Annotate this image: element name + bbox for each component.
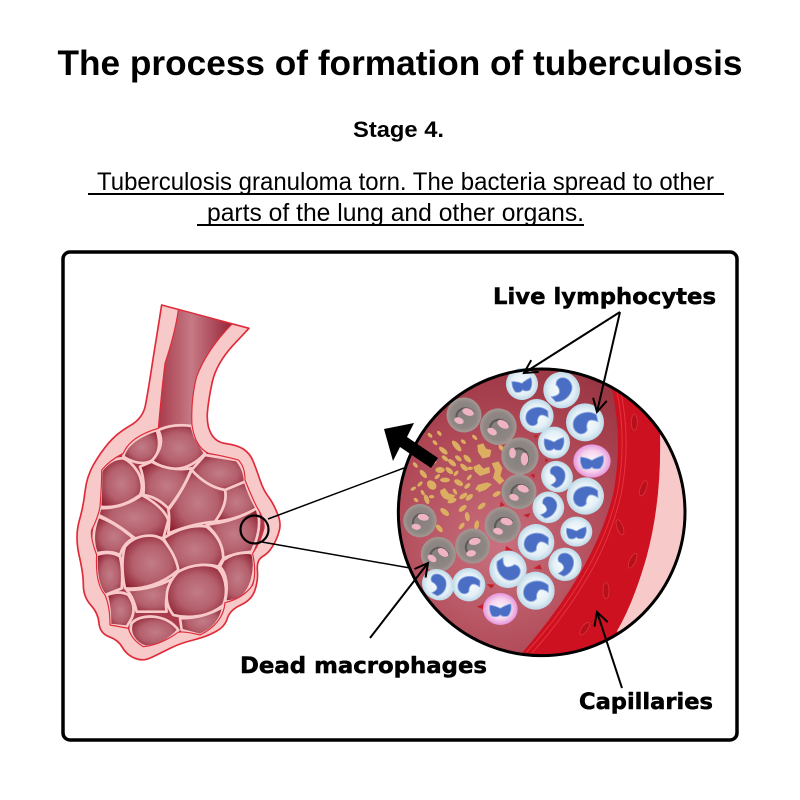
label: Live lymphocytes: Live lymphocytes	[493, 285, 716, 310]
title: The process of formation of tuberculosis	[58, 44, 742, 83]
alveolar sacs	[94, 425, 259, 647]
capillary	[522, 389, 684, 654]
arrow: capillaries	[597, 612, 622, 688]
arrow: dead macrophages	[370, 563, 428, 638]
panel: illustration frame	[63, 252, 737, 740]
zoom connector lines	[262, 468, 410, 568]
description text block: Tuberculosis granuloma torn. The bacteria spread to other	[97, 168, 714, 196]
label: Capillaries: Capillaries	[579, 690, 713, 715]
description text block: parts of the lung and other organs.	[207, 199, 584, 227]
bronchiole tube	[158, 310, 232, 429]
live lymphocytes	[416, 365, 611, 625]
magnifier ring on lung	[240, 516, 268, 544]
description text block	[88, 168, 724, 227]
inner wall outline	[91, 310, 264, 647]
arrow: spread direction	[384, 423, 438, 468]
alveolus inner cavity	[91, 310, 264, 647]
bacteria	[410, 430, 505, 533]
illustration: lung alveoli	[77, 305, 280, 660]
magnified tissue circle	[396, 368, 686, 658]
red fragments	[477, 435, 549, 609]
label: Dead macrophages: Dead macrophages	[240, 654, 487, 679]
alveolus outer wall	[77, 305, 280, 660]
stage heading: Stage 4.	[353, 117, 444, 142]
dead macrophages	[401, 393, 541, 579]
arrows: live lymphocytes	[524, 312, 620, 412]
